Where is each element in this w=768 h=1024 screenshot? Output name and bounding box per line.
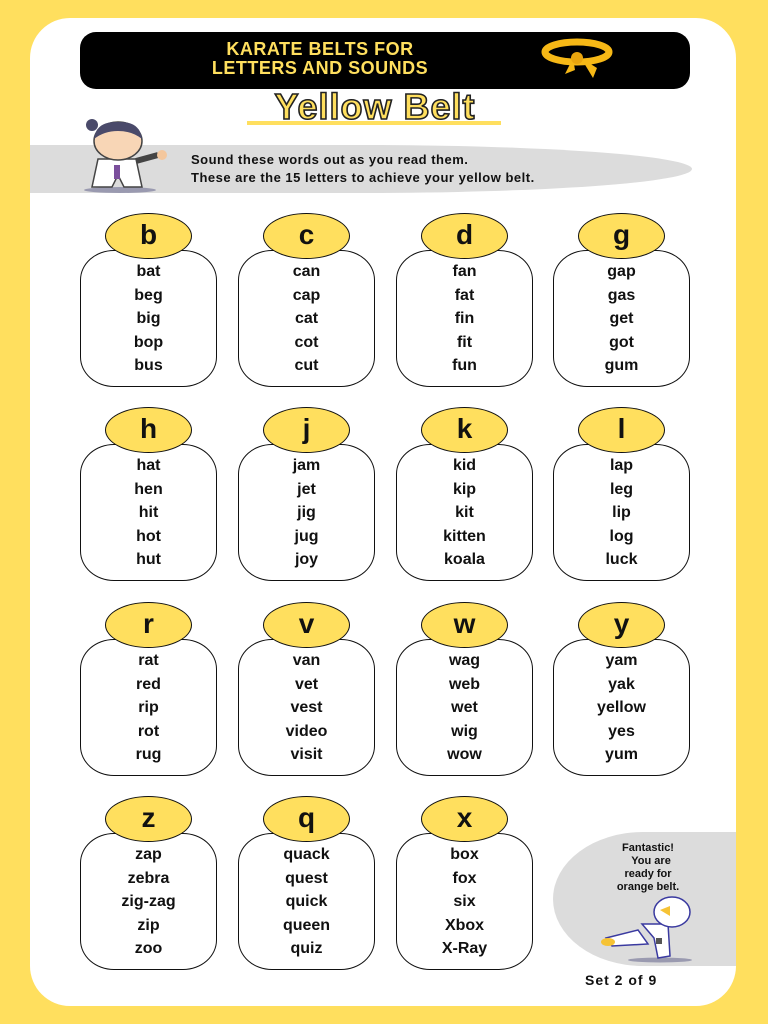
cell y: yam — [605, 652, 638, 669]
instruction text: These are the 15 letters to achieve your yellow belt. — [191, 170, 535, 185]
text: b — [140, 219, 157, 250]
cell q: quest — [285, 870, 328, 886]
icon: karate kid — [84, 119, 167, 193]
cell j: jam — [293, 457, 320, 474]
cell r: red — [136, 676, 161, 692]
cell d: fat — [455, 286, 474, 304]
cell z: zip — [137, 916, 160, 934]
cell d: fun — [452, 357, 477, 374]
cell w: wow — [447, 746, 482, 763]
cell c: cot — [294, 334, 318, 350]
cell k — [396, 407, 533, 581]
cell c: can — [293, 263, 320, 280]
cell g: gas — [608, 286, 635, 304]
cell l: lip — [612, 504, 631, 521]
title: Yellow Belt — [274, 86, 476, 127]
cell z — [80, 796, 217, 970]
cell y: yellow — [597, 699, 646, 716]
fantastic text: orange belt. — [617, 881, 679, 893]
cell j — [238, 407, 375, 581]
cell y: yes — [608, 722, 635, 740]
text: l — [618, 413, 625, 444]
cell w: web — [449, 676, 480, 692]
cell k: kip — [453, 480, 476, 498]
cell c — [238, 213, 375, 387]
cell b: bus — [134, 357, 163, 374]
cell z: zap — [135, 846, 162, 863]
text: d — [456, 219, 473, 250]
cell d: fan — [452, 263, 476, 280]
cell z: zoo — [135, 940, 162, 957]
cell x: six — [453, 893, 476, 910]
cell d — [396, 213, 533, 387]
cell w: wag — [449, 652, 480, 669]
header bar — [80, 32, 690, 89]
cell h: hot — [136, 528, 161, 544]
fantastic text: Fantastic! — [622, 842, 674, 854]
instruction text: Sound these words out as you read them. — [191, 152, 468, 167]
cell d: fit — [457, 334, 472, 350]
cell b — [80, 213, 217, 387]
cell q: quiz — [290, 940, 322, 957]
cell r: rat — [138, 652, 159, 669]
cell g: got — [609, 334, 634, 350]
text: w — [454, 608, 475, 639]
cell w: wig — [451, 722, 478, 740]
cell z: zig-zag — [121, 893, 176, 910]
cell h — [80, 407, 217, 581]
cell y: yak — [608, 676, 635, 692]
text: v — [299, 608, 314, 639]
cell k: koala — [444, 551, 485, 568]
cell x — [396, 796, 533, 970]
cell v: video — [286, 722, 327, 740]
cell x: X-Ray — [442, 940, 487, 957]
icon: kicking bird — [601, 896, 692, 962]
cell c: cut — [294, 357, 318, 374]
cell h: hat — [136, 457, 160, 474]
cell v: visit — [290, 746, 322, 763]
cell v: vet — [295, 676, 318, 692]
cell r — [80, 602, 217, 776]
cell l: luck — [605, 551, 638, 568]
cell j: joy — [295, 551, 318, 568]
cell k: kit — [455, 504, 474, 521]
cell k: kid — [453, 457, 476, 474]
cell q: quack — [283, 846, 330, 863]
cell z: zebra — [128, 870, 169, 886]
cell j: jug — [294, 528, 318, 544]
cell d: fin — [455, 310, 474, 327]
cell r: rot — [138, 722, 159, 740]
cell y — [553, 602, 690, 776]
fantastic text: ready for — [624, 868, 672, 880]
cell b: big — [136, 310, 160, 327]
cell q — [238, 796, 375, 970]
cell q: quick — [286, 893, 327, 910]
cell g: gap — [607, 263, 636, 280]
cell v — [238, 602, 375, 776]
cell x: Xbox — [445, 916, 484, 934]
text: c — [299, 219, 314, 250]
text: h — [140, 413, 157, 444]
cell l — [553, 407, 690, 581]
cell x: box — [450, 846, 479, 863]
header text: LETTERS AND SOUNDS — [212, 58, 428, 78]
cell g — [553, 213, 690, 387]
cell g: get — [610, 310, 634, 327]
icon: yellow belt — [542, 38, 612, 78]
cell v: vest — [290, 699, 323, 716]
cell c: cat — [295, 310, 318, 327]
fantastic text — [617, 842, 679, 893]
cell w: wet — [451, 699, 478, 716]
cell r: rip — [138, 699, 159, 716]
cell b: beg — [134, 286, 163, 304]
cell j: jet — [297, 480, 316, 498]
footer: set number: Set 2 of 9 — [585, 972, 657, 988]
fantastic text: You are — [631, 855, 671, 867]
instruction banner — [30, 145, 692, 193]
cell c: cap — [293, 286, 320, 304]
cell v: van — [293, 652, 320, 669]
header text: KARATE BELTS FOR — [226, 39, 414, 59]
text: y — [614, 608, 629, 639]
text: r — [143, 608, 154, 639]
cell l: leg — [610, 480, 633, 498]
text: j — [303, 413, 310, 444]
cell l: log — [610, 528, 634, 544]
text: k — [457, 413, 472, 444]
cell g: gum — [605, 357, 638, 374]
cell k: kitten — [443, 528, 486, 544]
text: q — [298, 802, 315, 833]
instruction text — [191, 152, 535, 185]
cell b: bop — [134, 334, 163, 350]
cell h: hen — [134, 480, 163, 498]
text: x — [457, 802, 472, 833]
cell w — [396, 602, 533, 776]
text: g — [613, 219, 630, 250]
cell l: lap — [610, 457, 633, 474]
cell h: hit — [139, 504, 158, 521]
cell y: yum — [605, 746, 638, 763]
header text — [212, 39, 428, 78]
cell h: hut — [136, 551, 161, 568]
cell b: bat — [136, 263, 160, 280]
panel: fantastic — [553, 832, 736, 966]
cell r: rug — [136, 746, 161, 763]
cell j: jig — [297, 504, 316, 521]
text: z — [142, 802, 156, 833]
cell x: fox — [452, 870, 476, 886]
cell q: queen — [283, 916, 330, 934]
